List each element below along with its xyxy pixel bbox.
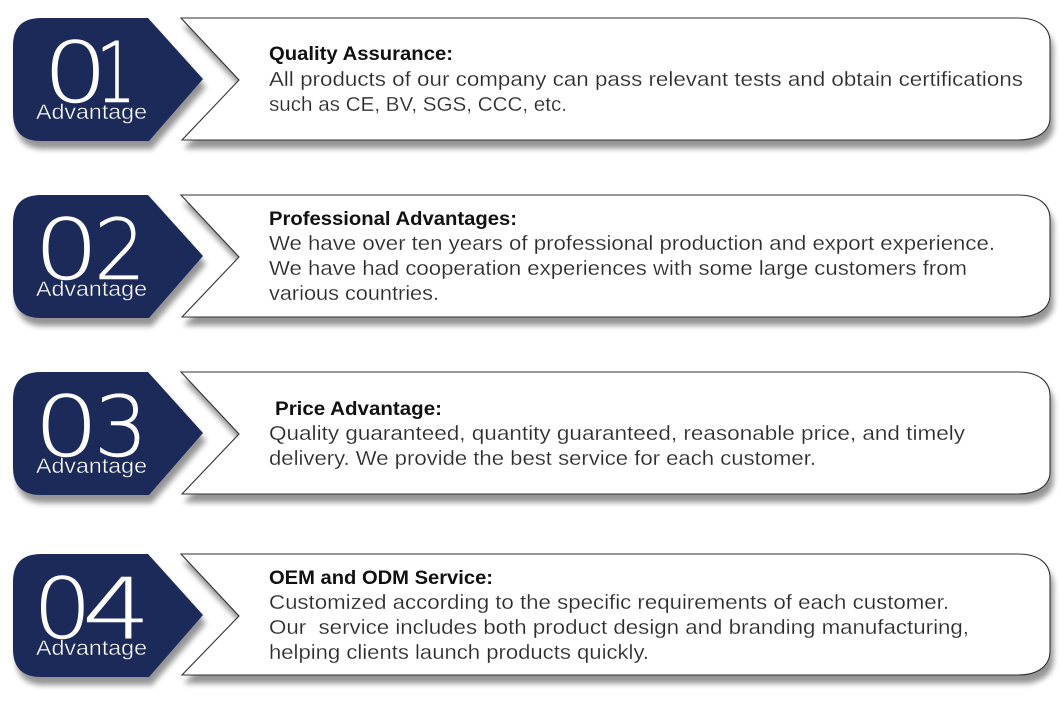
text block 3: Quality guaranteed, quantity guaranteed, reasonable price, and timely bbox=[269, 423, 965, 445]
navy badge 02: 2 bbox=[94, 201, 146, 299]
white arrow panel 1 bbox=[181, 18, 1050, 140]
text block 3: Price Advantage: bbox=[275, 398, 442, 420]
white arrow panel 4 bbox=[181, 554, 1050, 675]
text block 2: various countries. bbox=[269, 283, 439, 305]
navy badge 01 bbox=[13, 18, 203, 141]
row 4: OEM and ODM service bbox=[13, 554, 1050, 677]
text block 2: We have over ten years of professional production and export experience. bbox=[269, 233, 995, 255]
text block 4: Customized according to the specific requirements of each customer. bbox=[269, 592, 949, 614]
navy badge 01: 0 bbox=[43, 24, 108, 122]
text block 2 bbox=[269, 208, 995, 305]
text block 2: We have had cooperation experiences with some large customers from bbox=[269, 258, 967, 280]
row 3: price advantage bbox=[13, 372, 1050, 495]
text block 2: Professional Advantages: bbox=[269, 208, 517, 230]
text block 1 bbox=[269, 43, 1023, 116]
navy badge 01: Advantage bbox=[36, 101, 147, 124]
navy badge 02: Advantage bbox=[36, 278, 147, 301]
navy badge 03: Advantage bbox=[36, 455, 147, 478]
navy badge 03 bbox=[13, 372, 203, 495]
text block 4: helping clients launch products quickly. bbox=[269, 642, 649, 664]
text block 1: such as CE, BV, SGS, CCC, etc. bbox=[269, 94, 567, 116]
white arrow panel 2 bbox=[181, 195, 1050, 317]
navy badge 04: 4 bbox=[82, 560, 151, 658]
navy badge 02 bbox=[13, 195, 203, 318]
row 2: professional advantages bbox=[13, 195, 1050, 318]
navy badge 03: 3 bbox=[94, 378, 148, 476]
text block 3: delivery. We provide the best service for each customer. bbox=[269, 448, 816, 470]
white arrow panel 3 bbox=[181, 372, 1050, 494]
text block 1: All products of our company can pass relevant tests and obtain certifications bbox=[269, 69, 1023, 91]
text block 1: Quality Assurance: bbox=[269, 43, 453, 65]
navy badge 04: 0 bbox=[33, 560, 92, 658]
text block 3 bbox=[269, 398, 965, 470]
text block 4: Our service includes both product design and branding manufacturing, bbox=[269, 617, 969, 639]
navy badge 01: 1 bbox=[96, 24, 136, 122]
navy badge 02: 0 bbox=[34, 201, 99, 299]
navy badge 04: Advantage bbox=[36, 637, 147, 660]
row 1: quality assurance bbox=[13, 18, 1050, 141]
text block 4: OEM and ODM Service: bbox=[269, 567, 493, 589]
navy badge 03: 0 bbox=[34, 378, 99, 476]
navy badge 04 bbox=[13, 554, 203, 677]
text block 4 bbox=[269, 567, 969, 664]
